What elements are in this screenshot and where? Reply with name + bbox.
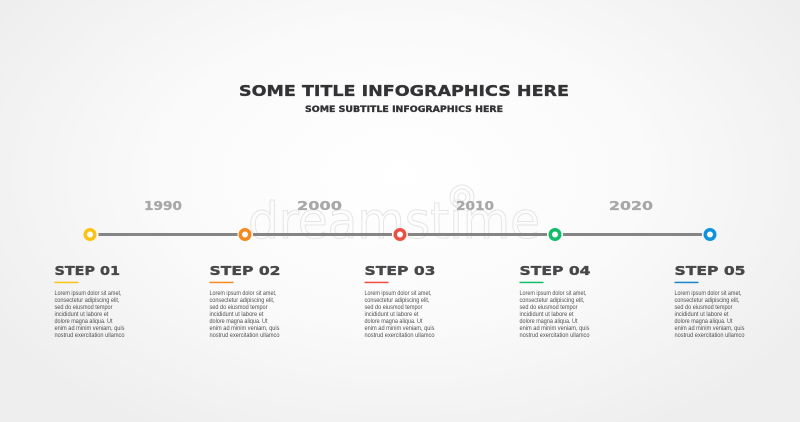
body text: step 02: nostrud exercitation ullamco: [210, 332, 280, 339]
heading: step 02: STEP 02: [210, 263, 280, 278]
body text: step 01: enim ad minim veniam, quis: [54, 325, 124, 332]
panel: step 01: [54, 263, 125, 339]
body text: step 03: Lorem ipsum dolor sit amet,: [364, 290, 432, 297]
timeline node: step 03: [394, 228, 406, 241]
body text: step 04: Lorem ipsum dolor sit amet,: [520, 290, 587, 297]
year label: 1990: 1990: [144, 198, 182, 213]
body text: step 03: nostrud exercitation ullamco: [364, 332, 435, 339]
accent rule: step 02: [210, 282, 234, 283]
body text: step 03: enim ad minim veniam, quis: [364, 325, 434, 332]
body text: step 04: [520, 290, 590, 339]
body text: step 02: sed do eiusmod tempor: [210, 304, 268, 311]
heading: step 05: STEP 05: [674, 263, 746, 278]
body text: step 01: [54, 290, 125, 339]
accent rule: step 05: [674, 282, 698, 283]
body text: step 04: enim ad minim veniam, quis: [520, 325, 590, 332]
body text: step 05: sed do eiusmod tempor: [674, 304, 733, 311]
year label: 2000: 2000: [297, 198, 342, 213]
body text: step 01: dolore magna aliqua. Ut: [54, 318, 113, 325]
body text: step 01: Lorem ipsum dolor sit amet,: [54, 290, 122, 297]
body text: step 02: consectetur adipiscing elit,: [210, 297, 275, 304]
body text: step 02: dolore magna aliqua. Ut: [210, 318, 268, 325]
title: SOME TITLE INFOGRAPHICS HERE: [239, 82, 569, 100]
subtitle: SOME SUBTITLE INFOGRAPHICS HERE: [305, 105, 503, 115]
body text: step 01: nostrud exercitation ullamco: [54, 332, 125, 339]
heading: step 03: STEP 03: [364, 263, 436, 278]
body text: step 02: incididunt ut labore et: [210, 311, 264, 318]
body text: step 05: nostrud exercitation ullamco: [674, 332, 745, 339]
panel: step 03: [364, 263, 436, 339]
body text: step 04: consectetur adipiscing elit,: [520, 297, 585, 304]
body text: step 01: incididunt ut labore et: [54, 311, 109, 318]
body text: step 05: dolore magna aliqua. Ut: [674, 318, 733, 325]
body text: step 03: sed do eiusmod tempor: [364, 304, 423, 311]
timeline node: step 04: [548, 228, 562, 241]
timeline node: step 01: [84, 228, 96, 241]
body text: step 04: incididunt ut labore et: [520, 311, 574, 318]
body text: step 05: enim ad minim veniam, quis: [674, 325, 744, 332]
panel: step 02: [210, 263, 280, 339]
body text: step 02: enim ad minim veniam, quis: [210, 325, 280, 332]
heading: step 04: STEP 04: [520, 263, 591, 278]
year label: 2010: 2010: [456, 198, 494, 213]
body text: step 03: [364, 290, 435, 339]
body text: step 03: dolore magna aliqua. Ut: [364, 318, 423, 325]
body text: step 01: consectetur adipiscing elit,: [54, 297, 120, 304]
timeline node: step 02: [238, 228, 252, 241]
heading: step 01: STEP 01: [54, 263, 120, 278]
accent rule: step 01: [54, 282, 78, 283]
body text: step 05: consectetur adipiscing elit,: [674, 297, 740, 304]
year label: 2020: 2020: [609, 198, 653, 213]
body text: step 03: consectetur adipiscing elit,: [364, 297, 430, 304]
body text: step 05: incididunt ut labore et: [674, 311, 729, 318]
body text: step 04: nostrud exercitation ullamco: [520, 332, 590, 339]
timeline node: step 05: [704, 228, 716, 241]
accent rule: step 04: [520, 282, 544, 283]
body text: step 01: sed do eiusmod tempor: [54, 304, 113, 311]
accent rule: step 03: [364, 282, 388, 283]
panel: step 05: [674, 263, 746, 339]
body text: step 05: Lorem ipsum dolor sit amet,: [674, 290, 742, 297]
body text: step 04: sed do eiusmod tempor: [520, 304, 578, 311]
timeline connectors: [98, 233, 702, 236]
body text: step 03: incididunt ut labore et: [364, 311, 419, 318]
body text: step 04: dolore magna aliqua. Ut: [520, 318, 578, 325]
body text: step 05: [674, 290, 745, 339]
body text: step 02: Lorem ipsum dolor sit amet,: [210, 290, 277, 297]
body text: step 02: [210, 290, 280, 339]
panel: step 04: [520, 263, 591, 339]
watermark: dreamstime: dreamstime: [248, 192, 540, 250]
